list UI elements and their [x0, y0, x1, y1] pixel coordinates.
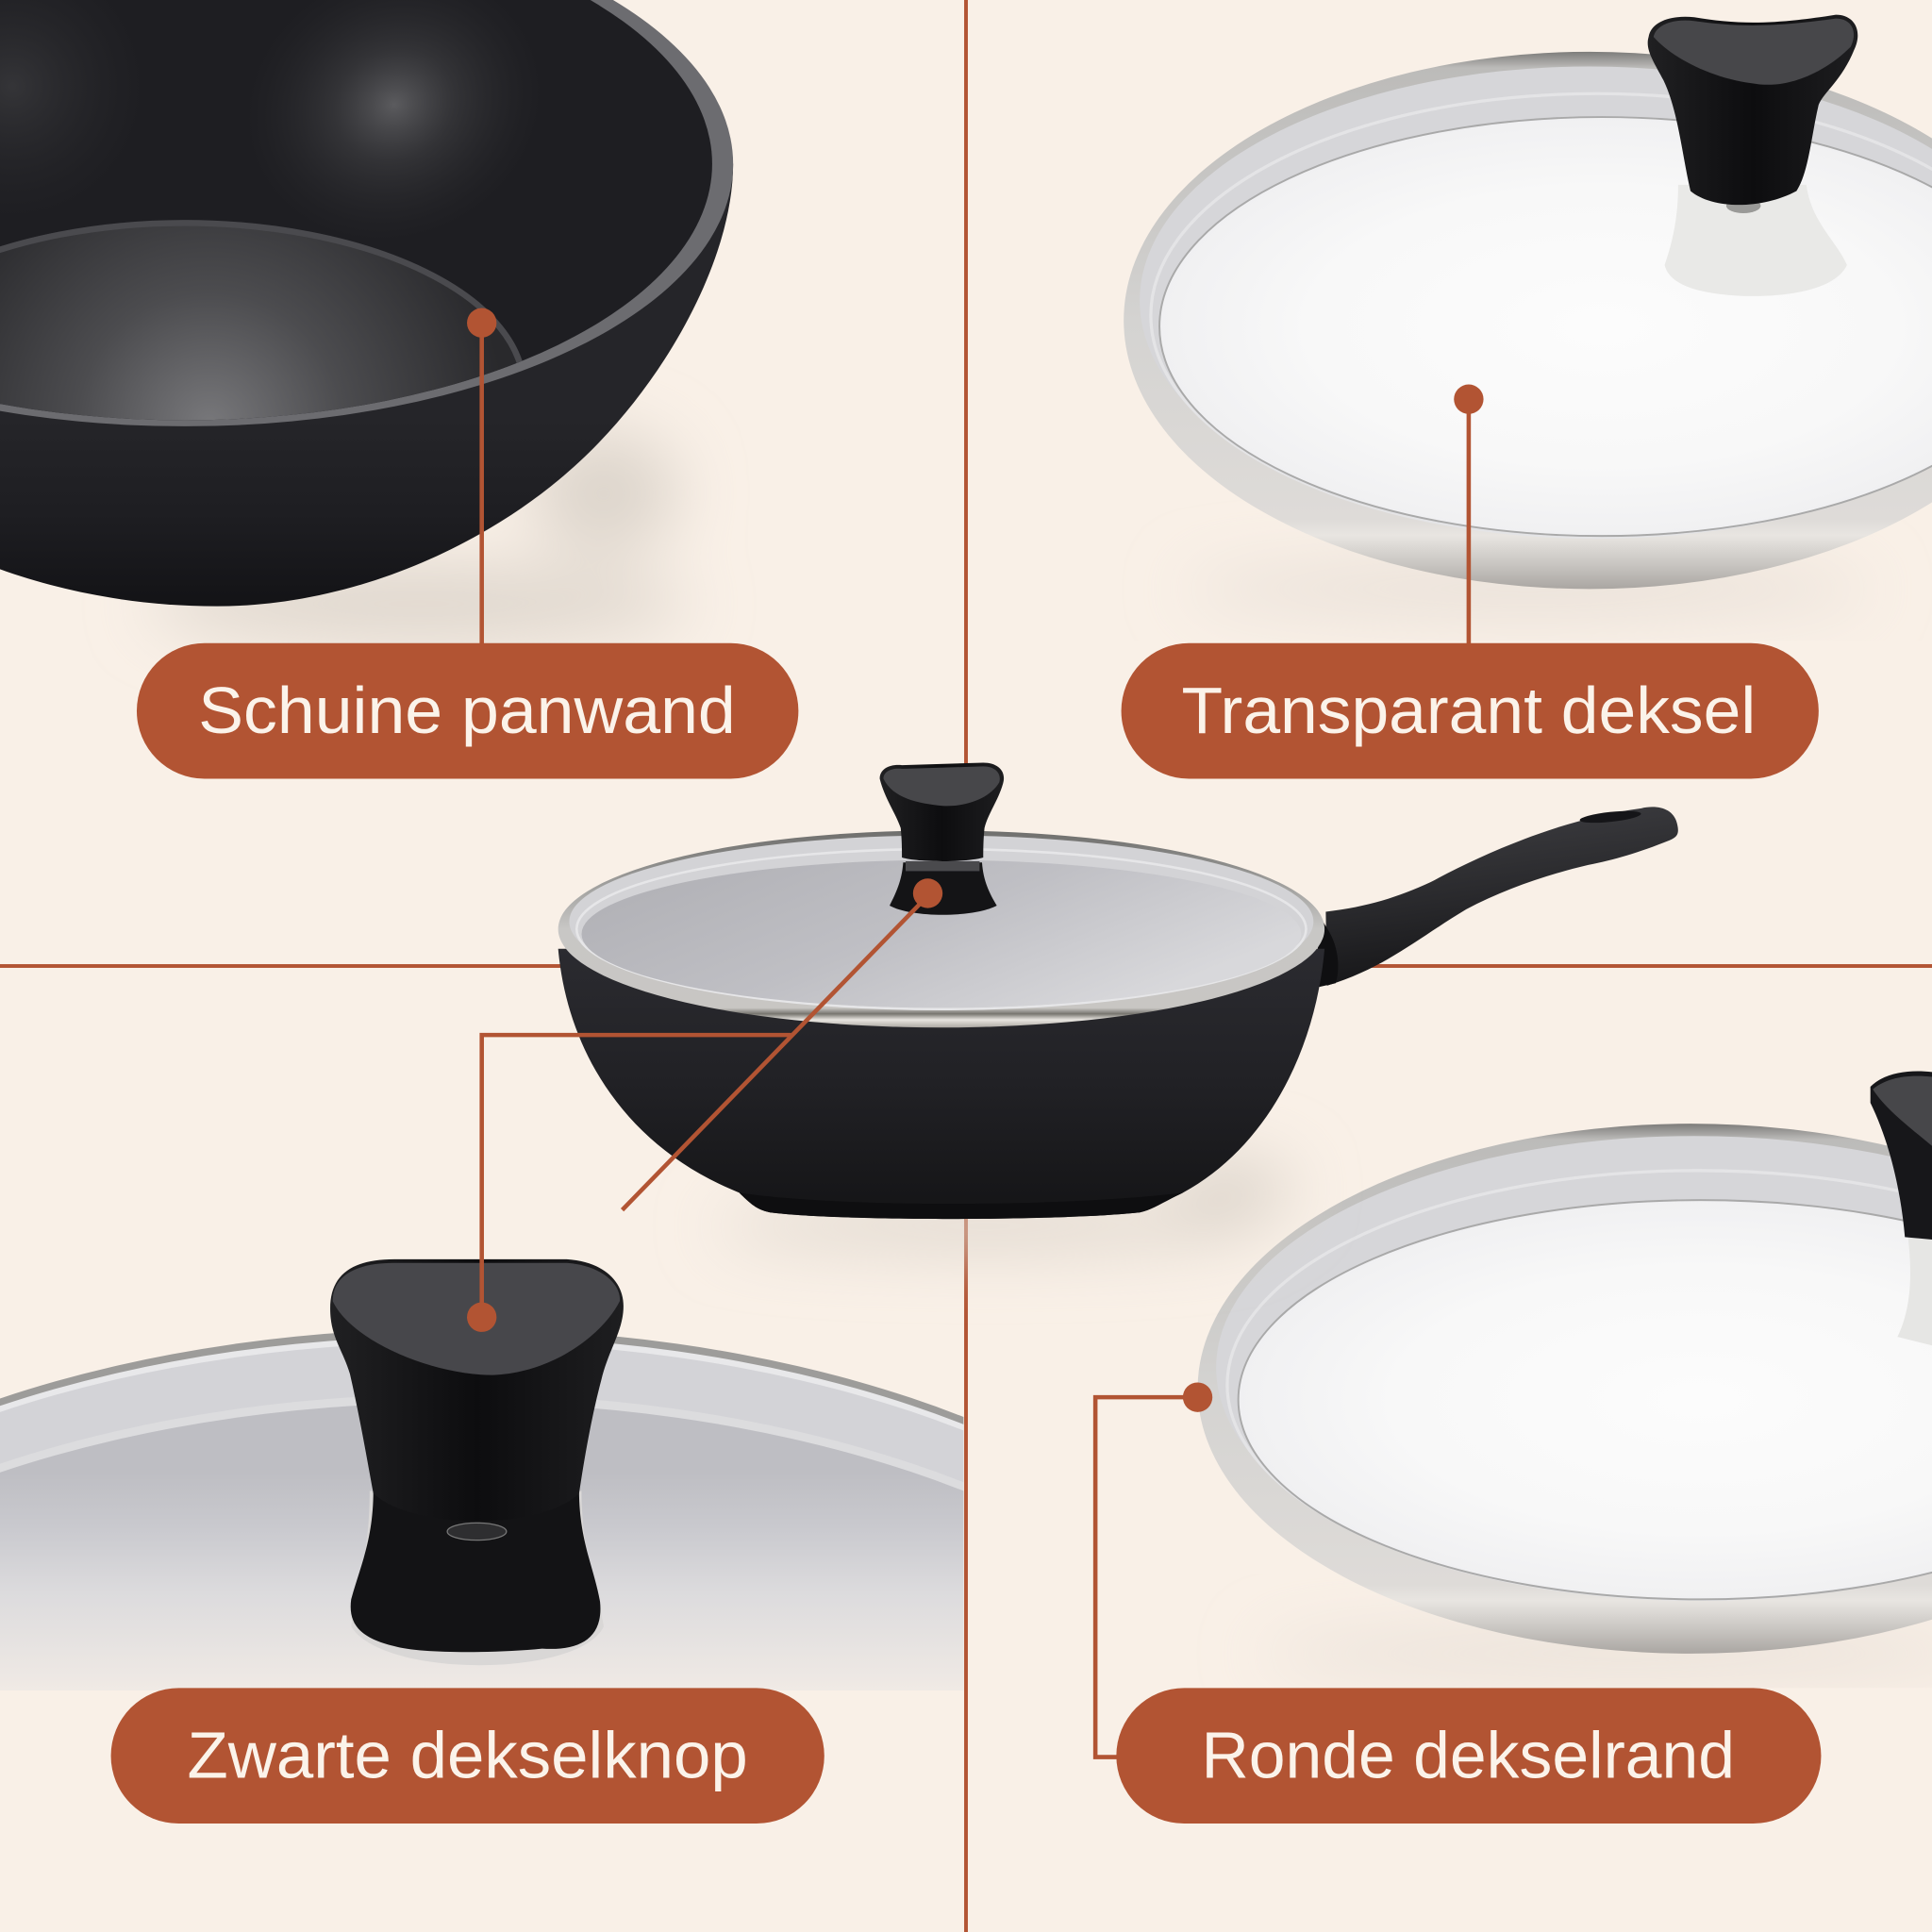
lid glass band: [569, 836, 1313, 1008]
wok interior: [0, 0, 712, 420]
label: Transparant deksel: [1122, 643, 1819, 778]
lid glass: [581, 860, 1301, 1008]
knob reflection: [1897, 1232, 1932, 1345]
lid rim: [558, 830, 1324, 1027]
knob base: [890, 862, 997, 915]
knob reflection: [351, 1491, 604, 1665]
bg patch above rim: [612, 0, 740, 164]
pan body: [558, 949, 1324, 1219]
knob reflection: [1665, 185, 1847, 296]
lid glass band: [1140, 66, 1932, 319]
lid shadow: [1417, 1636, 1837, 1675]
handle collar: [1313, 918, 1338, 989]
knob screw: [1726, 203, 1760, 213]
panel: black lid knob: [0, 1259, 963, 1690]
panel: transparent lid: [1124, 15, 1932, 611]
knob: [880, 762, 1004, 861]
label: Zwarte dekselknop: Zwarte dekselknop: [188, 1719, 748, 1792]
label: Schuine panwand: [137, 643, 798, 778]
callout lines: [482, 323, 1469, 1757]
lid rim: [1198, 1124, 1932, 1654]
label: Ronde dekselrand: Ronde dekselrand: [1201, 1719, 1735, 1792]
lid rim and glass: [0, 1328, 963, 1690]
handle hole: [1579, 808, 1641, 825]
panel: round lid rim: [1198, 1071, 1932, 1674]
callout dots: [467, 308, 1484, 1412]
knob top surface: [1654, 19, 1854, 85]
knob: [1871, 1071, 1932, 1240]
wok rim: [0, 0, 733, 426]
wok exterior: [0, 164, 734, 607]
label: Schuine panwand: Schuine panwand: [198, 674, 736, 747]
pan handle: [1325, 807, 1678, 986]
panel: sloped wok wall: [0, 0, 740, 641]
knob top surface: [333, 1263, 620, 1375]
wok shadow: [148, 431, 690, 641]
label: Transparant deksel: Transparant deksel: [1182, 674, 1756, 747]
label: Ronde dekselrand: [1116, 1688, 1821, 1824]
knob: [1648, 15, 1857, 205]
lid glass centre: [1159, 117, 1932, 536]
knob top surface: [1873, 1076, 1932, 1146]
lid shadow: [1294, 566, 1761, 616]
pan base: [740, 1192, 1183, 1219]
lid rim: [1124, 52, 1932, 589]
center pan shadow: [715, 1158, 1293, 1248]
label: Zwarte dekselknop: [111, 1688, 824, 1824]
knob top surface: [883, 766, 1000, 806]
knob body: [330, 1259, 624, 1521]
center pan: [558, 762, 1678, 1219]
wok floor: [0, 0, 591, 553]
knob screw band: [906, 861, 979, 871]
knob screw: [447, 1523, 507, 1541]
lid glass band: [1217, 1136, 1904, 1389]
lid glass centre: [1239, 1200, 1932, 1599]
